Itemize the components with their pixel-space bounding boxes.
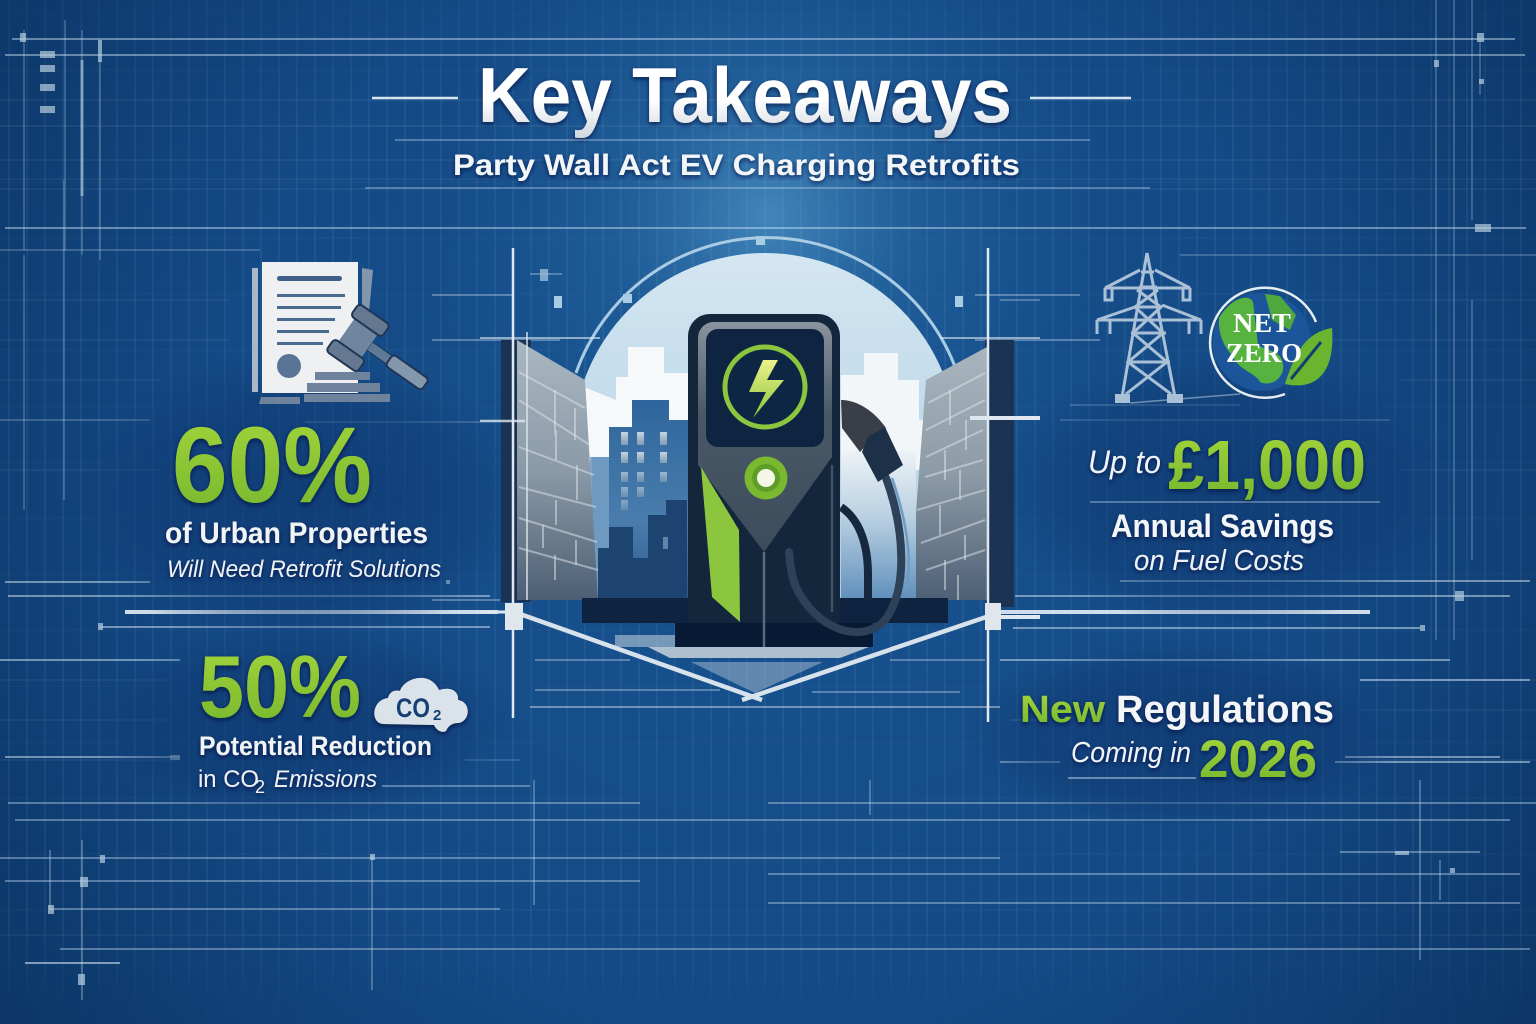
blueprint corner lines and brackets	[480, 248, 1040, 722]
stat: 50%: 50%	[199, 637, 361, 736]
icon: net zero globe and leaf	[1210, 288, 1332, 398]
right brick party wall	[916, 340, 1014, 607]
label: will need retrofit solutions: Will Need Retrofit Solutions	[167, 556, 441, 583]
heading: new regulations	[1020, 689, 1334, 731]
icon: CO2 cloud: 2	[433, 707, 441, 724]
icon: net zero globe and leaf: NET	[1233, 308, 1291, 338]
label: in CO2 emissions: in CO	[198, 766, 259, 793]
ground slab	[582, 598, 948, 693]
construction lines around the centre	[432, 274, 1100, 600]
city skyline	[584, 347, 926, 602]
label: on fuel costs: on Fuel Costs	[1134, 545, 1304, 577]
label: in CO2 emissions	[198, 766, 377, 797]
left brick party wall	[501, 340, 598, 602]
label: potential reduction: Potential Reduction	[199, 731, 432, 761]
rear cable loop	[841, 507, 868, 600]
charging connector	[841, 400, 903, 482]
label: in CO2 emissions: Emissions	[274, 766, 377, 793]
icon: CO2 cloud	[374, 678, 468, 732]
dark panels behind side text	[70, 350, 1460, 830]
panel: 60% urban properties	[165, 262, 442, 583]
icon: legal document and gavel	[252, 262, 442, 409]
icon: CO2 cloud: CO	[396, 693, 430, 723]
icon: electricity pylon	[1097, 253, 1240, 403]
label: annual savings: Annual Savings	[1111, 508, 1334, 544]
stat: 2026: 2026	[1199, 730, 1317, 789]
label: in CO2 emissions: 2	[255, 777, 265, 797]
stat: 60%: 60%	[172, 404, 372, 525]
label: up to: Up to	[1088, 444, 1161, 480]
panel: fuel savings	[1088, 253, 1380, 577]
panel: 50% CO2 reduction	[198, 637, 530, 797]
label: coming in: Coming in	[1071, 737, 1191, 769]
title	[365, 51, 1150, 188]
heading: new regulations: New	[1020, 689, 1105, 731]
stat: £1,000: £1,000	[1168, 426, 1366, 504]
heading: new regulations: Regulations	[1116, 689, 1334, 731]
title: Party Wall Act EV Charging Retrofits	[453, 149, 1020, 182]
charging status ring with bolt icon	[725, 347, 805, 427]
icon: net zero globe and leaf: ZERO	[1226, 338, 1302, 368]
halo disc and arc	[540, 236, 963, 637]
central illustration: EV charger between party walls	[432, 236, 1100, 722]
indicator light	[744, 456, 788, 500]
label: of urban properties: of Urban Properties	[165, 517, 428, 550]
title: Key Takeaways	[478, 51, 1012, 139]
panel: new regulations	[1020, 689, 1334, 789]
charging cable	[789, 478, 909, 632]
charger body	[688, 314, 840, 647]
green accent stripe	[701, 467, 740, 622]
